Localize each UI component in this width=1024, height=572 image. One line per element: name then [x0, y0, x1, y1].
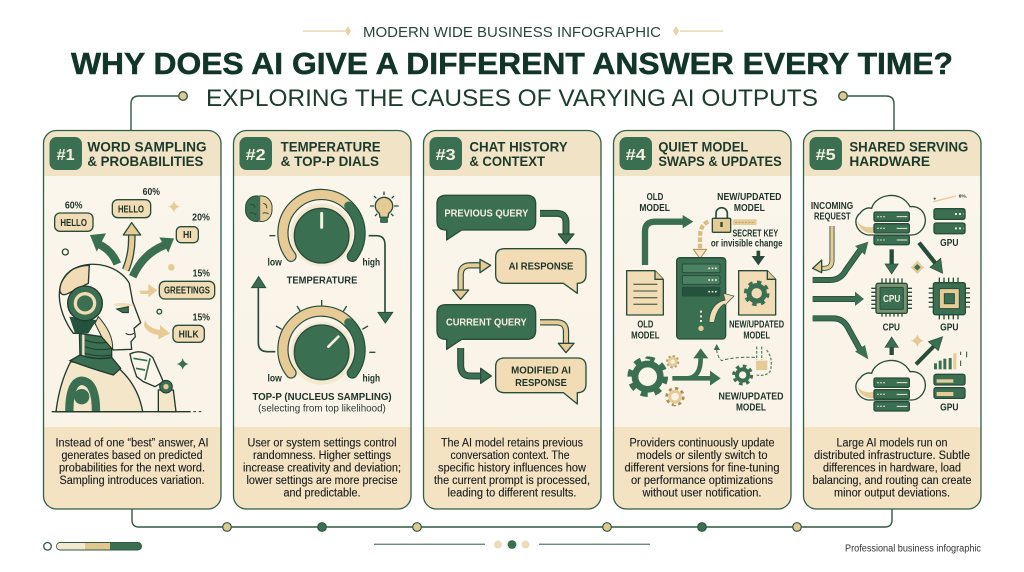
badge #2: #2: [246, 147, 266, 164]
top-p dial: low: [267, 374, 282, 385]
description 5: distributed infrastructure. Subtle: [814, 450, 970, 462]
top-p dial: TOP-P (NUCLEUS SAMPLING): [252, 392, 392, 403]
word options: 15%: [193, 312, 210, 323]
arrow: to modified response (tan): [540, 322, 574, 353]
heading 5: [849, 140, 968, 169]
dashed arrow: [693, 222, 708, 259]
gears: [630, 356, 683, 405]
top-p dial: (selecting from top likelihood): [258, 404, 386, 415]
description 2: lower settings are more precise: [246, 475, 398, 487]
word options: 60%: [143, 187, 160, 198]
routing arrows: [813, 242, 868, 359]
word options: 60%: [65, 200, 83, 211]
document: old model: [627, 271, 663, 341]
labels: old and new model: NEW/UPDATED: [717, 192, 782, 203]
word options: GREETINGS: [164, 285, 210, 296]
description 4: Providers continuously update: [630, 438, 774, 450]
word options: HELLO: [60, 218, 87, 229]
heading 5: HARDWARE: [849, 154, 930, 169]
word options: 20%: [192, 213, 210, 224]
decorative sparkles: [62, 201, 189, 370]
panel 3 icons: [437, 140, 586, 404]
small gear and dashed route: NEW/UPDATED: [718, 391, 784, 402]
document: old model: MODEL: [631, 330, 660, 341]
labels: old and new model: OLD: [647, 192, 663, 203]
chip: CPU: CPU: [883, 323, 900, 334]
description 4: different versions for fine-tuning: [624, 462, 780, 474]
word options: 15%: [193, 269, 210, 280]
chip: CPU: [871, 278, 912, 334]
heading 1: [87, 140, 207, 169]
heading 1: & PROBABILITIES: [87, 154, 203, 169]
arrow: top-p to temperature: [252, 277, 275, 352]
robot thinker: [52, 264, 201, 412]
heading 5: SHARED SERVING: [849, 140, 968, 155]
badge #5: #5: [816, 147, 836, 164]
GPU racks bottom with bar chart: GPU: [940, 403, 959, 414]
description 1: [56, 438, 208, 487]
labels: old and new model: [639, 192, 782, 214]
description 2: [243, 438, 401, 500]
word options: HI: [183, 230, 192, 241]
icon: brain: [246, 196, 272, 222]
description 3: leading to different results.: [448, 488, 576, 500]
branching arrow: [672, 348, 721, 386]
description 1: Instead of one “best” answer, AI: [56, 438, 208, 450]
badge #1: #1: [57, 147, 75, 164]
badge #4: #4: [626, 147, 646, 164]
description 4: models or silently switch to: [636, 450, 768, 462]
description 1: generates based on predicted: [62, 450, 202, 462]
heading 4: [658, 140, 782, 169]
panel 2 icons: [246, 140, 399, 415]
badge #1: [50, 137, 82, 170]
incoming request: INCOMING: [811, 201, 853, 212]
small gear and dashed route: [714, 344, 784, 414]
arrows from bottom cloud: [885, 334, 943, 364]
GPU racks bottom with bar chart: [934, 352, 967, 414]
badge #3: [430, 137, 462, 170]
description 3: the current prompt is processed,: [434, 475, 590, 487]
panel 1: word sampling: [44, 130, 221, 509]
panel 2: temperature and top-p: [234, 130, 411, 509]
bubble: previous query: [437, 195, 536, 240]
eyebrow label: MODERN WIDE BUSINESS INFOGRAPHIC: [363, 24, 661, 41]
icon: lock and secret key: SECRET KEY: [732, 229, 779, 240]
arrows from head: [90, 223, 174, 339]
description 3: The AI model retains previous: [441, 438, 583, 450]
bubble: previous query: PREVIOUS QUERY: [444, 209, 529, 220]
panel 4 icons: [627, 140, 784, 414]
panel 1 icons: [52, 140, 215, 412]
top-p dial: [252, 300, 392, 415]
panel 4: model swaps: [614, 130, 791, 509]
heading 2: [281, 140, 381, 169]
description 4: or performance optimizations: [631, 475, 773, 487]
document: new model: [729, 271, 784, 341]
description 4: without user notification.: [642, 488, 762, 500]
document: new model: MODEL: [743, 330, 770, 341]
icon: lock and secret key: [711, 208, 783, 250]
footer note: Professional business infographic: [845, 544, 981, 554]
bubble: current query: CURRENT QUERY: [446, 318, 527, 329]
description 2: User or system settings control: [248, 438, 396, 450]
description 5: Large AI models run on: [836, 438, 948, 450]
labels: old and new model: MODEL: [734, 203, 765, 214]
panel 5 icons: [811, 140, 970, 414]
panel 5: shared hardware: [804, 130, 981, 509]
description 5: [812, 438, 972, 500]
bubble: modified AI response: MODIFIED AI: [511, 365, 571, 376]
title: WHY DOES AI GIVE A DIFFERENT ANSWER EVERY TIME?: [71, 46, 953, 81]
description 3: specific history influences how: [438, 462, 587, 474]
heading 2: TEMPERATURE: [281, 140, 381, 155]
word options: HELLO: [118, 205, 144, 216]
bottom timeline connector: [132, 509, 892, 531]
arrow: to AI response: [540, 213, 574, 244]
description 1: probabilities for the next word.: [59, 462, 205, 474]
chip: CPU: CPU: [883, 294, 900, 305]
arrow: down to new model: [752, 251, 765, 265]
description 2: increase creativity and deviation;: [243, 462, 401, 474]
incoming request: REQUEST: [814, 211, 851, 222]
bubble: AI response: AI RESPONSE: [509, 261, 574, 272]
icon: light bulb: [370, 192, 399, 223]
description 3: [434, 438, 590, 500]
heading 3: & CONTEXT: [469, 154, 546, 169]
cloud servers bottom: [856, 360, 925, 411]
top-p dial: high: [362, 374, 380, 385]
description 5: differences in hardware, load: [823, 462, 961, 474]
GPU racks top: GPU: [940, 238, 959, 249]
description 3: conversation context. The: [450, 450, 570, 462]
arrow: old model up: [645, 215, 693, 265]
bubble: AI response: [496, 249, 586, 293]
bubble: modified AI response: RESPONSE: [515, 378, 567, 389]
icon: lock and secret key: or invisible change: [711, 239, 783, 250]
heading 1: WORD SAMPLING: [87, 140, 207, 155]
subtitle: EXPLORING THE CAUSES OF VARYING AI OUTPUTS: [206, 85, 818, 112]
badge #4: [620, 137, 652, 170]
badge #5: [810, 137, 842, 170]
description 2: randomness. Higher settings: [253, 450, 391, 462]
labels: old and new model: MODEL: [639, 203, 670, 214]
bubble: current query: [437, 305, 536, 349]
temperature dial: TEMPERATURE: [287, 275, 358, 286]
panel 3: chat history: [424, 130, 601, 509]
badge #2: [240, 137, 272, 170]
cloud servers top: [856, 195, 925, 245]
description 2: and predictable.: [284, 488, 360, 500]
word options: HILK: [179, 329, 199, 340]
chip: GPU: GPU: [940, 323, 959, 334]
description 1: Sampling introduces variation.: [60, 475, 204, 487]
word options: [55, 187, 215, 342]
heading 2: & TOP-P DIALS: [281, 154, 379, 169]
progress legend: [44, 542, 142, 550]
description 4: [624, 438, 780, 500]
server: [677, 258, 734, 339]
small gear and dashed route: MODEL: [736, 403, 766, 414]
temperature dial: low: [267, 258, 282, 269]
centre ornament: [374, 540, 650, 549]
description 5: minor output deviations.: [834, 488, 950, 500]
heading 4: QUIET MODEL: [658, 140, 748, 155]
arrow: temperature to top-p: [369, 236, 393, 323]
temperature dial: [267, 194, 380, 286]
heading 3: [469, 140, 568, 169]
GPU racks top: 6%.: [959, 194, 968, 200]
description 5: balancing, and routing can create: [812, 475, 972, 487]
heading 3: CHAT HISTORY: [469, 140, 568, 155]
top connector: left: [131, 92, 187, 130]
top connector: right: [839, 92, 894, 130]
arrows from top cloud: [885, 243, 943, 274]
double arrow: response to current query: [453, 259, 491, 299]
badge #3: #3: [436, 147, 456, 164]
heading 4: SWAPS & UPDATES: [658, 154, 782, 169]
temperature dial: high: [362, 258, 380, 269]
GPU racks top: [933, 194, 968, 249]
chip: GPU: [929, 278, 970, 334]
incoming request: [811, 201, 853, 273]
bubble: modified AI response: [496, 358, 586, 404]
document: new model: NEW/UPDATED: [729, 319, 784, 330]
document: old model: OLD: [637, 319, 653, 330]
arrow: to modified response (green): [461, 348, 491, 383]
